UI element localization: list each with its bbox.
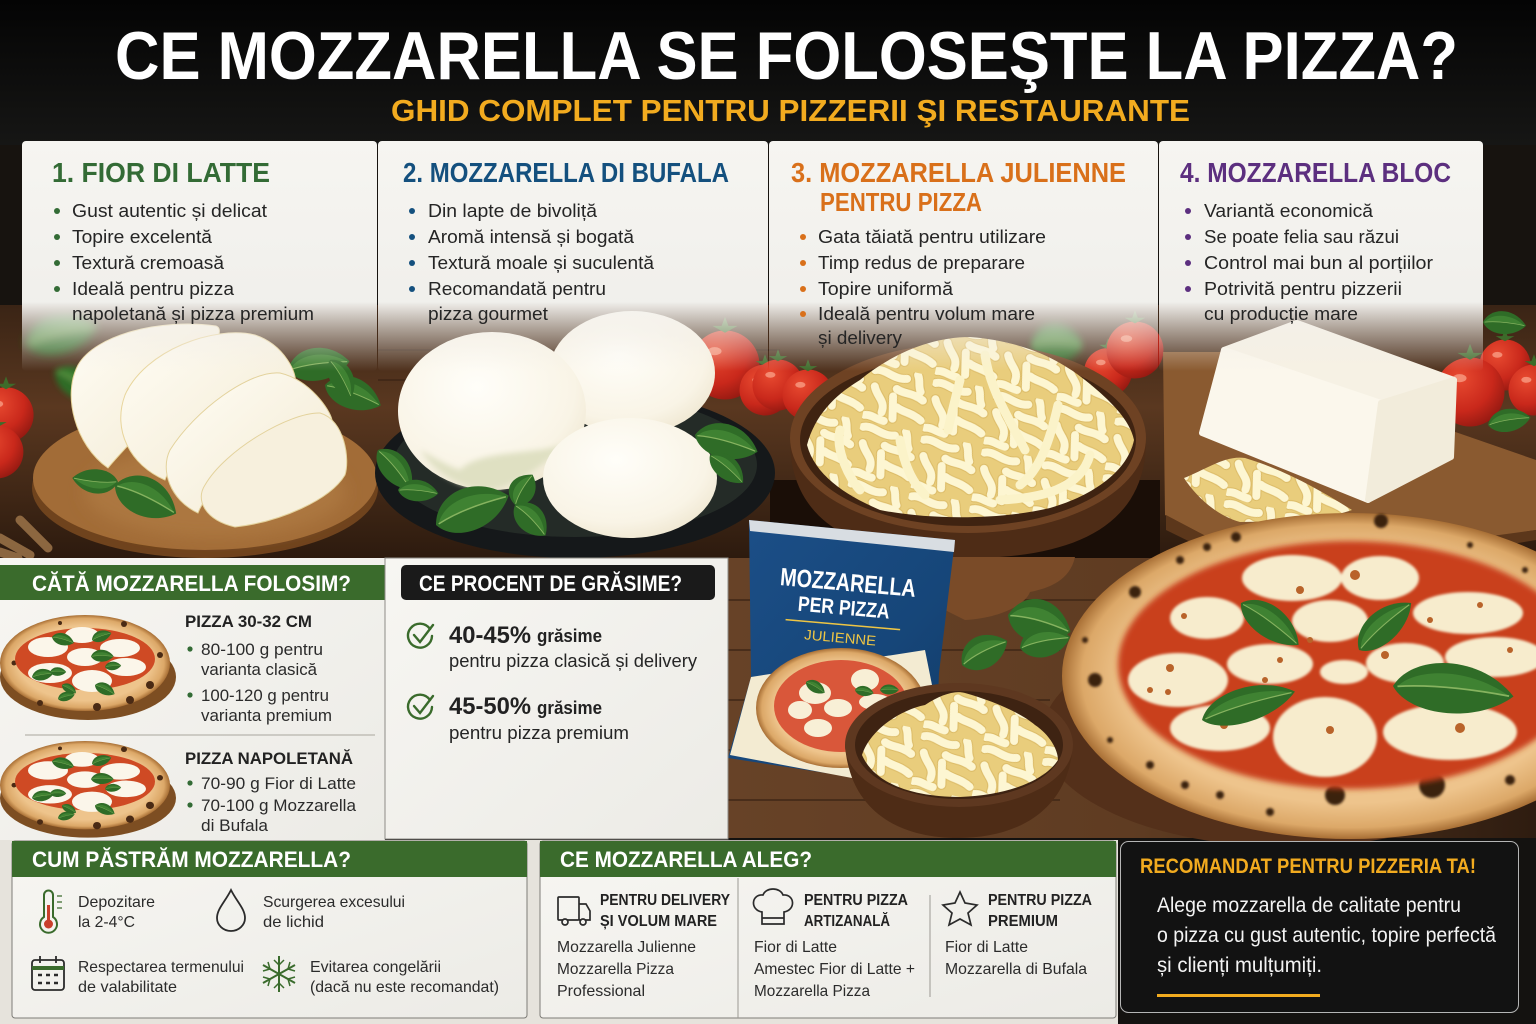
text: artizanala: Fior di Latte — [754, 939, 837, 956]
list: fior di latte: Textură cremoasă — [72, 252, 225, 273]
header bar: CUM PĂSTRĂM MOZZARELLA? — [32, 847, 351, 872]
header pill: CE PROCENT DE GRĂSIME? — [419, 571, 682, 596]
text: delivery: ȘI VOLUM MARE — [600, 913, 717, 930]
photo: mozzarella block — [1163, 309, 1536, 556]
text: pizza napoletana: 70-90 g Fior di Latte — [201, 775, 356, 793]
icon: star — [943, 892, 977, 925]
text: pizza 30-32 cm: 80-100 g pentru — [201, 641, 323, 659]
icon: classic pizza — [0, 615, 176, 720]
panel: mozzarella di bufala — [378, 141, 768, 371]
text: 40-45% — [449, 622, 697, 671]
subtitle: GHID COMPLET PENTRU PIZZERII ŞI RESTAURANTE — [391, 93, 1190, 128]
list: mozzarella bloc: Control mai bun al porțiilor — [1204, 252, 1433, 273]
list: fior di latte: Topire excelentă — [72, 226, 213, 247]
panel: cum pastram mozzarella — [0, 840, 1118, 1024]
text: pizza 30-32 cm: PIZZA 30-32 CM — [185, 613, 312, 631]
list: mozzarella di bufala — [409, 200, 655, 324]
text: delivery: Professional — [557, 983, 645, 1000]
list: mozzarella bloc — [1185, 200, 1433, 324]
list: mozzarella di bufala: Aromă intensă și bogată — [428, 226, 635, 247]
text: 40-45%: 40-45% — [449, 622, 531, 649]
text: pizza 30-32 cm: 100-120 g pentru — [201, 687, 329, 705]
text: premium: Mozzarella di Bufala — [945, 961, 1087, 978]
list: mozzarella julienne: Timp redus de preparare — [818, 252, 1025, 273]
list: mozzarella julienne: Gata tăiată pentru utilizare — [818, 226, 1046, 247]
text: delivery: Mozzarella Julienne — [557, 939, 696, 956]
heading: mozzarella julienne: PENTRU PIZZA — [820, 187, 982, 217]
list: mozzarella di bufala: Din lapte de bivoliță — [428, 200, 598, 221]
bag label: MOZZARELLA — [779, 563, 917, 603]
panel: recomandat — [1120, 842, 1518, 1012]
text: congelare — [310, 959, 499, 996]
text: scurgerea: de lichid — [263, 914, 324, 931]
heading: recomandat: RECOMANDAT PENTRU PIZZERIA TA! — [1140, 855, 1476, 878]
text: termen: Respectarea termenului — [78, 959, 244, 976]
icon: check — [408, 695, 433, 719]
icon: calendar — [32, 956, 64, 990]
list: fior di latte: napoletană și pizza premium — [72, 303, 314, 324]
photo: fior di latte on wooden board — [0, 304, 387, 558]
header bar: CĂTĂ MOZZARELLA FOLOSIM? — [32, 571, 351, 596]
list: fior di latte — [54, 200, 314, 324]
text: 45-50%: pentru pizza premium — [449, 723, 629, 743]
photo: wooden board stack — [945, 557, 1075, 620]
text: recomandare: o pizza cu gust autentic, topire perfectă — [1157, 924, 1496, 947]
photo: small bowl of shredded mozzarella — [845, 683, 1073, 838]
text: delivery — [557, 892, 731, 1000]
text: 45-50%: grăsime — [537, 698, 602, 718]
list: mozzarella di bufala: pizza gourmet — [428, 303, 548, 324]
text: premium: Fior di Latte — [945, 939, 1028, 956]
text: recomandare: Alege mozzarella de calitate pentru — [1157, 894, 1461, 917]
text: pizza 30-32 cm: varianta premium — [201, 707, 332, 725]
panel: ce mozzarella aleg — [540, 841, 1116, 1018]
text: 40-45%: grăsime — [537, 626, 602, 646]
list: mozzarella bloc: Potrivită pentru pizzerii — [1204, 278, 1402, 299]
header bar: CE MOZZARELLA ALEG? — [560, 847, 812, 872]
list: mozzarella julienne: Ideală pentru volum mare — [818, 303, 1035, 324]
photo: margherita pizza — [1042, 513, 1536, 847]
heading: fior di latte: 1. FIOR DI LATTE — [52, 157, 270, 188]
text: 40-45%: pentru pizza clasică și delivery — [449, 651, 697, 671]
panel: mozzarella julienne — [769, 141, 1158, 371]
text: termen — [78, 959, 244, 996]
heading: mozzarella di bufala: 2. MOZZARELLA DI BUFALA — [403, 157, 729, 188]
text: artizanala: Mozzarella Pizza — [754, 983, 870, 1000]
list: mozzarella bloc: Variantă economică — [1204, 200, 1374, 221]
list: mozzarella julienne — [800, 226, 1046, 348]
panel: ce procent de grasime — [385, 558, 728, 839]
text: depozitare: la 2-4°C — [78, 914, 135, 931]
text: termen: de valabilitate — [78, 979, 177, 996]
text: depozitare: Depozitare — [78, 894, 155, 911]
heading: mozzarella julienne: 3. MOZZARELLA JULIENNE — [791, 157, 1126, 188]
bag label: JULIENNE — [804, 626, 877, 649]
heading: mozzarella julienne — [791, 157, 1126, 217]
list: mozzarella julienne: Topire uniformă — [818, 278, 954, 299]
text: artizanala: PENTRU PIZZA — [804, 892, 908, 909]
text: pizza 30-32 cm: varianta clasică — [201, 661, 318, 679]
icon: chef hat — [753, 889, 793, 924]
text: depozitare — [78, 894, 155, 931]
bag label: PER PIZZA — [797, 593, 891, 624]
text: recomandare: și clienți mulțumiți. — [1157, 954, 1322, 977]
text: premium: PENTRU PIZZA — [988, 892, 1092, 909]
heading: mozzarella bloc: 4. MOZZARELLA BLOC — [1180, 157, 1451, 188]
header bar — [12, 841, 527, 877]
text: pizza napoletana: di Bufala — [201, 817, 269, 835]
text: recomandare — [1157, 894, 1496, 977]
header pill — [401, 565, 715, 600]
text: delivery: PENTRU DELIVERY — [600, 892, 731, 909]
text: 45-50% — [449, 693, 629, 743]
text: scurgerea — [263, 894, 405, 931]
list: mozzarella bloc: Se poate felia sau răzui — [1204, 226, 1399, 247]
icon: snowflake — [263, 956, 295, 992]
text: congelare: (dacă nu este recomandat) — [310, 979, 499, 996]
icon: delivery truck — [558, 897, 590, 925]
icon: thermometer — [40, 890, 62, 933]
text: scurgerea: Scurgerea excesului — [263, 894, 405, 911]
list: fior di latte: Gust autentic și delicat — [72, 200, 267, 221]
icon: neapolitan pizza — [0, 741, 176, 838]
text: pizza napoletana: PIZZA NAPOLETANĂ — [185, 749, 353, 768]
photo: julienne mozzarella bowl — [752, 310, 1164, 558]
text: pizza napoletana — [185, 749, 357, 835]
text: artizanala: ARTIZANALĂ — [804, 913, 890, 930]
panel: cata mozzarella folosim — [0, 558, 385, 840]
list: mozzarella bloc: cu producție mare — [1204, 303, 1358, 324]
icon: water drop — [217, 890, 245, 931]
text: artizanala: Amestec Fior di Latte + — [754, 961, 915, 978]
text: delivery: Mozzarella Pizza — [557, 961, 674, 978]
photo: mozzarella di bufala on dark plate — [369, 311, 790, 558]
text: 45-50%: 45-50% — [449, 693, 531, 720]
panel: fior di latte — [22, 141, 377, 371]
list: mozzarella di bufala: Recomandată pentru — [428, 278, 606, 299]
header bar — [0, 565, 385, 600]
photo: basil sprig — [953, 592, 1077, 678]
list: mozzarella di bufala: Textură moale și suculentă — [428, 252, 655, 273]
text: premium: PREMIUM — [988, 913, 1058, 930]
text: pizza 30-32 cm — [185, 613, 332, 725]
text: pizza napoletana: 70-100 g Mozzarella — [201, 797, 357, 815]
text: premium — [945, 892, 1092, 978]
bag label — [775, 563, 917, 652]
panel: mozzarella bloc — [1159, 141, 1483, 371]
list: mozzarella julienne: și delivery — [818, 327, 903, 348]
icon: check — [408, 624, 433, 648]
header bar — [540, 841, 1116, 877]
list: fior di latte: Ideală pentru pizza — [72, 278, 235, 299]
photo: julienne bag — [728, 520, 955, 778]
text: congelare: Evitarea congelării — [310, 959, 441, 976]
text: artizanala — [754, 892, 915, 1000]
